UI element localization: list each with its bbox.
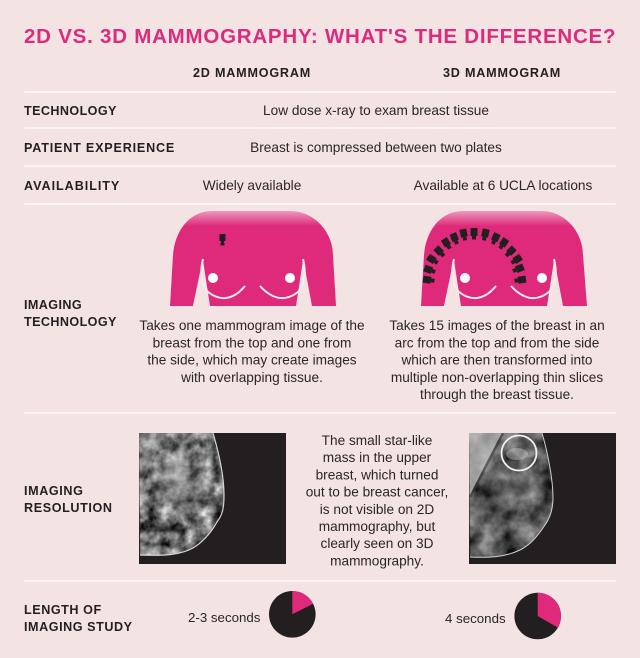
image: 3D mammogram with circled mass (469, 433, 616, 564)
text: explanation of mass: The small star-like (322, 433, 432, 448)
column heading: 3D mammogram: 3D MAMMOGRAM (443, 66, 561, 80)
chart: 2D duration pie (269, 591, 316, 638)
label: patient experience: PATIENT EXPERIENCE (24, 141, 175, 155)
text: 3D imaging technology description: multiple non-overlapping thin slices (391, 370, 603, 385)
callout: circle around mass (502, 436, 536, 470)
text: 2D imaging technology description: the side, which may create images (147, 353, 357, 368)
text: explanation of mass: mammography, but (319, 519, 435, 534)
label: availability: AVAILABILITY (24, 179, 120, 193)
text: 2D imaging technology description: Takes one mammogram image of the (139, 318, 365, 333)
text: explanation of mass: mass in the upper (323, 450, 432, 465)
text: 2D imaging technology description: with overlapping tissue. (180, 370, 323, 385)
text: 2D duration: 2-3 seconds (188, 610, 261, 625)
text: explanation of mass: out to be breast cancer, (306, 485, 448, 500)
text: 3D imaging technology description: through the breast tissue. (420, 387, 574, 402)
row: availability (24, 178, 593, 193)
label: imaging technology: TECHNOLOGY (24, 315, 117, 329)
text: explanation of mass: breast, which turned (316, 467, 438, 482)
text: 3D imaging technology description: arc from the top and from the side (395, 335, 599, 350)
text: 3D duration: 4 seconds (445, 611, 506, 626)
text: 3D imaging technology description: Takes 15 images of the breast in an (389, 318, 605, 333)
text: explanation of mass: is not visible on 2D (320, 502, 434, 517)
text: 2D availability: Widely available (203, 178, 301, 193)
label: length of imaging study: LENGTH OF (24, 603, 102, 617)
text: explanation of mass: clearly seen on 3D (321, 536, 434, 551)
text: 3D imaging technology description: which are then transformed into (400, 353, 593, 368)
title: 2D VS. 3D MAMMOGRAPHY: WHAT'S THE DIFFERENCE? (24, 25, 616, 48)
label: imaging resolution: IMAGING (24, 484, 83, 498)
text: 2D imaging technology description: breast from the top and one from (153, 335, 351, 350)
label: technology: TECHNOLOGY (24, 104, 117, 118)
text: technology description: Low dose x-ray to exam breast tissue (263, 103, 489, 118)
icon: 2D torso with single x-ray source (170, 211, 336, 306)
icon: 3D torso with arc of x-ray sources (421, 211, 587, 306)
text: 3D availability: Available at 6 UCLA locations (414, 178, 593, 193)
column heading: 2D mammogram: 2D MAMMOGRAM (193, 66, 311, 80)
text: patient experience description: Breast is compressed between two plates (250, 140, 502, 155)
row: patient experience (24, 140, 502, 155)
row: technology (24, 103, 489, 118)
label: imaging technology: IMAGING (24, 298, 82, 312)
text: explanation of mass: mammography. (330, 553, 424, 568)
chart: 3D duration pie (514, 593, 561, 639)
label: length of imaging study: IMAGING STUDY (24, 620, 133, 634)
image: 2D mammogram (139, 433, 286, 564)
label: imaging resolution: RESOLUTION (24, 501, 113, 515)
